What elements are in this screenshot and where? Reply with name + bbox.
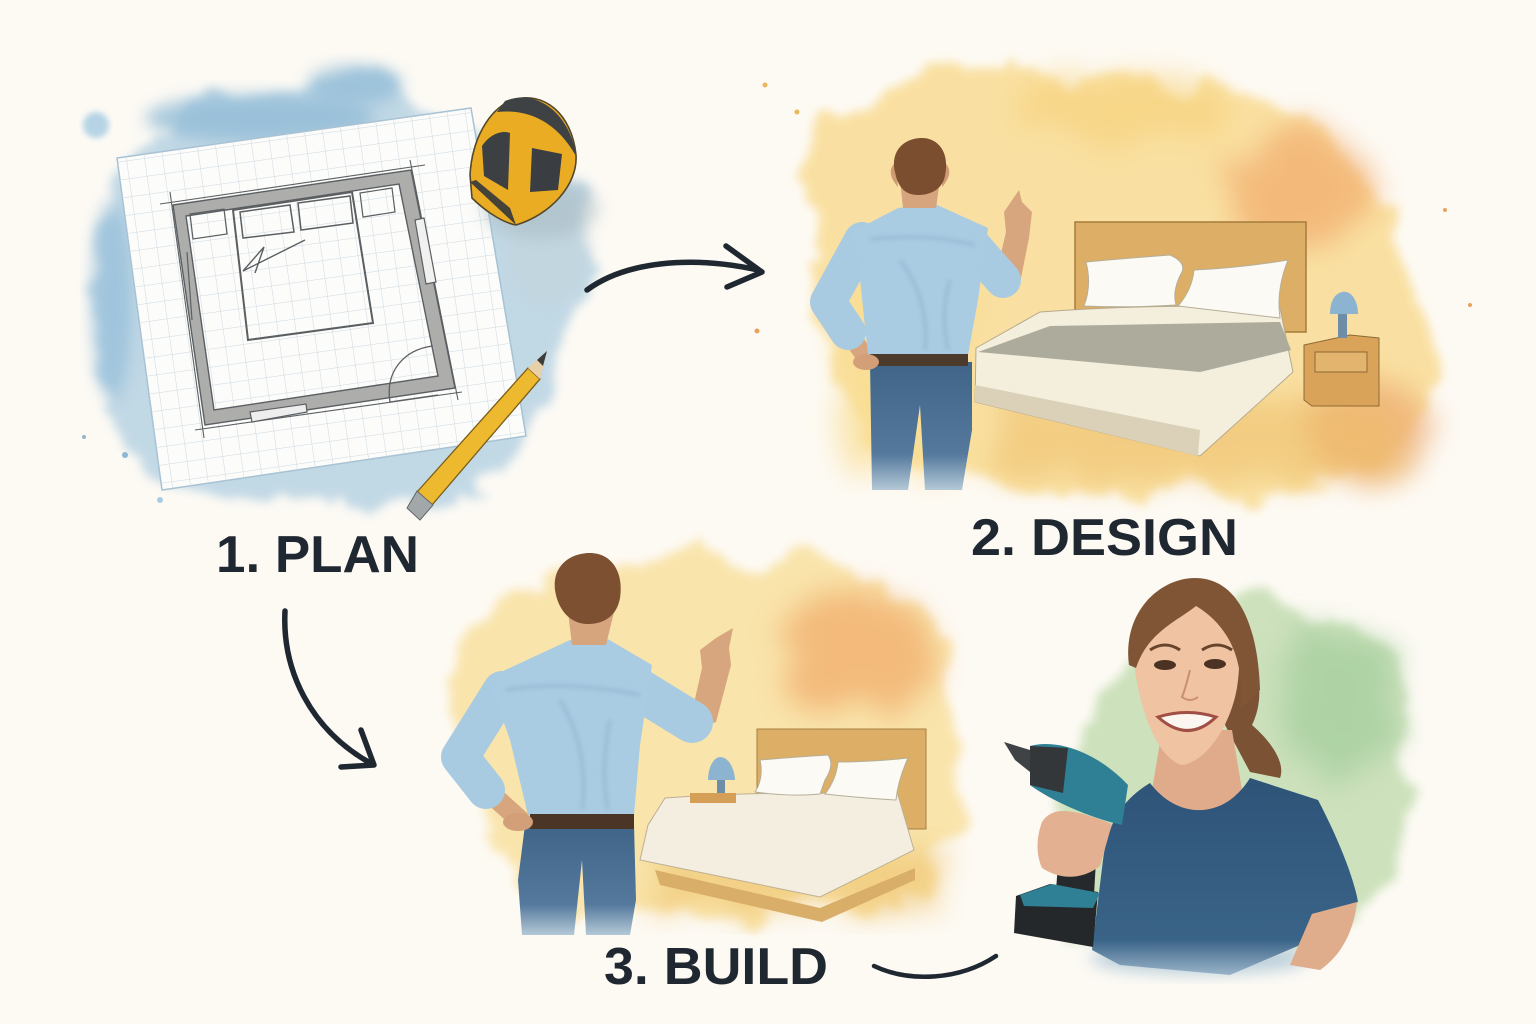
arm <box>1290 902 1357 970</box>
heading: 2. DESIGN: 2. DESIGN <box>971 509 1238 567</box>
floor plan sketch <box>160 160 462 438</box>
headboard <box>1075 222 1306 332</box>
orange watercolor wash <box>455 554 960 913</box>
face <box>1133 600 1239 765</box>
neck and collar <box>568 612 614 645</box>
t-shirt <box>1092 778 1358 975</box>
icon: tape measure <box>470 97 598 238</box>
man pointing <box>460 553 733 935</box>
icon: cordless drill <box>1004 742 1128 947</box>
arrow: plan to design <box>587 246 762 290</box>
orange watercolor wash <box>754 69 1472 493</box>
hand on hip <box>853 354 879 370</box>
raised sleeve <box>968 240 1003 280</box>
man from behind <box>828 138 1032 490</box>
jeans <box>870 362 972 490</box>
icon: pencil <box>407 351 547 520</box>
forearm and pointing hand <box>996 190 1032 286</box>
ponytail <box>1225 640 1281 778</box>
hand on hip <box>503 813 533 831</box>
panel: build scene <box>455 553 960 996</box>
heading: 1. PLAN: 1. PLAN <box>216 526 419 584</box>
headboard <box>757 729 926 829</box>
hair <box>1128 578 1260 710</box>
ears <box>892 165 948 182</box>
hair <box>894 138 946 195</box>
neck and collar <box>900 180 940 208</box>
nightstand with lamp <box>1304 292 1379 406</box>
belt <box>530 814 634 829</box>
raised sleeve <box>640 690 692 722</box>
bed <box>975 255 1293 456</box>
green watercolor wash <box>1062 597 1420 974</box>
belt <box>870 354 968 366</box>
shirt torso <box>852 204 988 355</box>
jeans <box>518 825 636 935</box>
lamp on nightstand <box>690 757 736 803</box>
forearm and pointing hand <box>692 628 733 724</box>
panel: plan <box>82 65 598 584</box>
arrow: build connector <box>874 956 996 977</box>
panel: woman with drill <box>1004 578 1420 975</box>
left sleeve <box>460 690 502 790</box>
arrow: plan to build <box>285 611 374 767</box>
shirt torso <box>488 638 652 815</box>
heading: 3. BUILD: 3. BUILD <box>604 938 828 996</box>
left forearm <box>470 775 520 820</box>
bed <box>640 755 915 922</box>
neck <box>1152 730 1242 814</box>
left forearm <box>830 305 866 358</box>
facial features <box>1150 645 1232 730</box>
graph paper sheet <box>117 108 526 490</box>
left sleeve <box>828 240 862 332</box>
panel: design <box>754 69 1472 567</box>
blue watercolor wash <box>82 65 588 506</box>
hair <box>555 553 621 624</box>
